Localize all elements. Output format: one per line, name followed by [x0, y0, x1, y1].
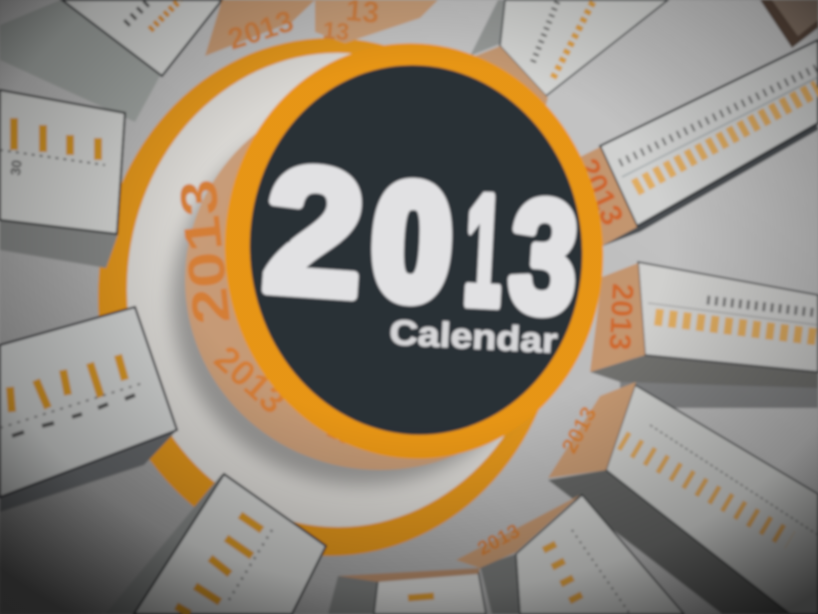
calendar box: top centre	[315, 0, 438, 46]
drum side lettering	[169, 177, 356, 450]
calendar box: left	[0, 90, 125, 268]
calendar box: lower left	[0, 307, 177, 512]
calendar box: left: 30	[7, 159, 25, 176]
calendar box: lower right: 2013	[556, 402, 601, 457]
drum side lettering: 2013	[207, 337, 294, 422]
calendar box: top left	[0, 0, 315, 122]
drum side wall	[185, 90, 575, 470]
digit 2: 2	[258, 129, 371, 334]
calendar box: top right: 13	[474, 64, 518, 107]
calendar box: top left: 2013	[224, 5, 298, 57]
white inner disc	[127, 53, 549, 527]
calendar box: top centre: 13	[321, 17, 350, 46]
central drum	[169, 24, 624, 478]
drum orange top	[204, 24, 624, 478]
slit in digit 2	[288, 206, 306, 240]
calendar box: bottom left	[105, 474, 326, 614]
calendar box: upper right: 2013	[570, 153, 631, 230]
drum side lettering: 13	[323, 417, 356, 450]
calendar box: lower right	[548, 382, 818, 614]
calendar box: bottom centre	[328, 568, 486, 614]
drum side lettering: 2013	[247, 334, 288, 373]
calendar box: right: 2013	[603, 283, 639, 351]
digit 1: 1	[460, 162, 507, 339]
calendar box: upper right	[568, 40, 818, 247]
digit 0: 0	[368, 151, 456, 333]
calendar box: right	[590, 262, 818, 408]
calendar box: bottom right	[456, 495, 684, 614]
drum side lettering: 2013	[169, 177, 242, 327]
digit 3: 3	[504, 166, 583, 347]
subtitle: Calendar: Calendar	[389, 313, 559, 361]
title: 2013	[258, 129, 583, 347]
drop shadow of central drum	[172, 115, 552, 485]
calendar box: top right	[470, 0, 668, 126]
calendar box: bottom right: 2013	[474, 520, 524, 560]
calendar box: far top right corner	[760, 0, 818, 48]
drum dark face	[232, 49, 600, 451]
orange ring on base	[98, 38, 562, 556]
